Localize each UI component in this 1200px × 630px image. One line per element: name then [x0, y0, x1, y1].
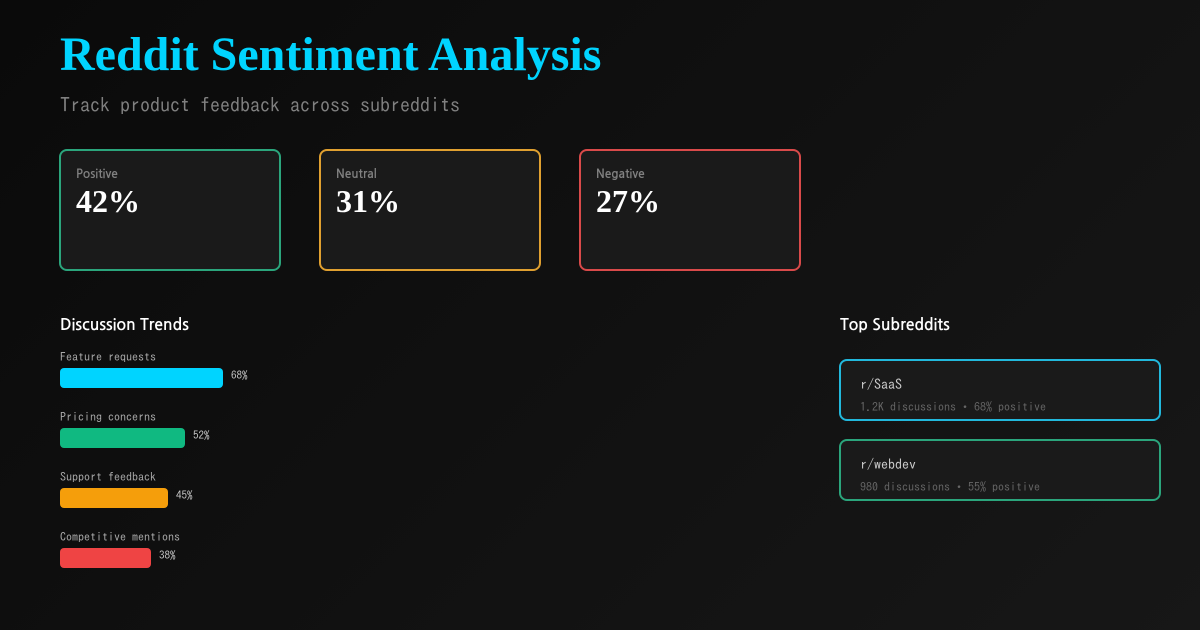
label: positive: Positive — [76, 168, 118, 180]
panel: negative card — [579, 149, 801, 271]
value: 38%: 38% — [159, 550, 176, 561]
value: positive: 42% — [76, 183, 140, 219]
bar: pricing concerns — [60, 428, 185, 448]
label: negative: Negative — [596, 168, 645, 180]
bar: feature requests — [60, 368, 223, 388]
bar: competitive mentions — [60, 548, 151, 568]
subreddit name: r/webdev — [860, 457, 916, 471]
panel: r/webdev — [839, 439, 1161, 501]
label: neutral: Neutral — [336, 168, 377, 180]
value: 68%: 68% — [231, 370, 248, 381]
subreddit stats: 980 discussions • 55% positive — [860, 481, 1040, 493]
row label: support feedback: Support feedback — [60, 470, 156, 482]
bar chart: discussion trends — [60, 350, 248, 568]
subreddit stats: 1.2K discussions • 68% positive — [860, 401, 1046, 413]
value: 45%: 45% — [176, 490, 192, 501]
value: neutral: 31% — [336, 183, 400, 219]
subreddit name: r/SaaS — [860, 377, 902, 391]
value: negative: 27% — [596, 183, 660, 219]
heading: top subreddits: Top Subreddits — [840, 318, 950, 333]
bar: support feedback — [60, 488, 168, 508]
panel: neutral card — [319, 149, 541, 271]
row label: feature requests: Feature requests — [60, 350, 156, 362]
panel: positive card — [59, 149, 281, 271]
value: 52%: 52% — [193, 430, 210, 441]
panel: r/SaaS — [839, 359, 1161, 421]
heading: discussion trends: Discussion Trends — [60, 318, 189, 333]
row label: competitive mentions: Competitive mentions — [60, 530, 180, 542]
row label: pricing concerns: Pricing concerns — [60, 410, 156, 422]
title: Reddit Sentiment Analysis — [60, 28, 601, 81]
subtitle: Track product feedback across subreddits — [60, 95, 460, 115]
